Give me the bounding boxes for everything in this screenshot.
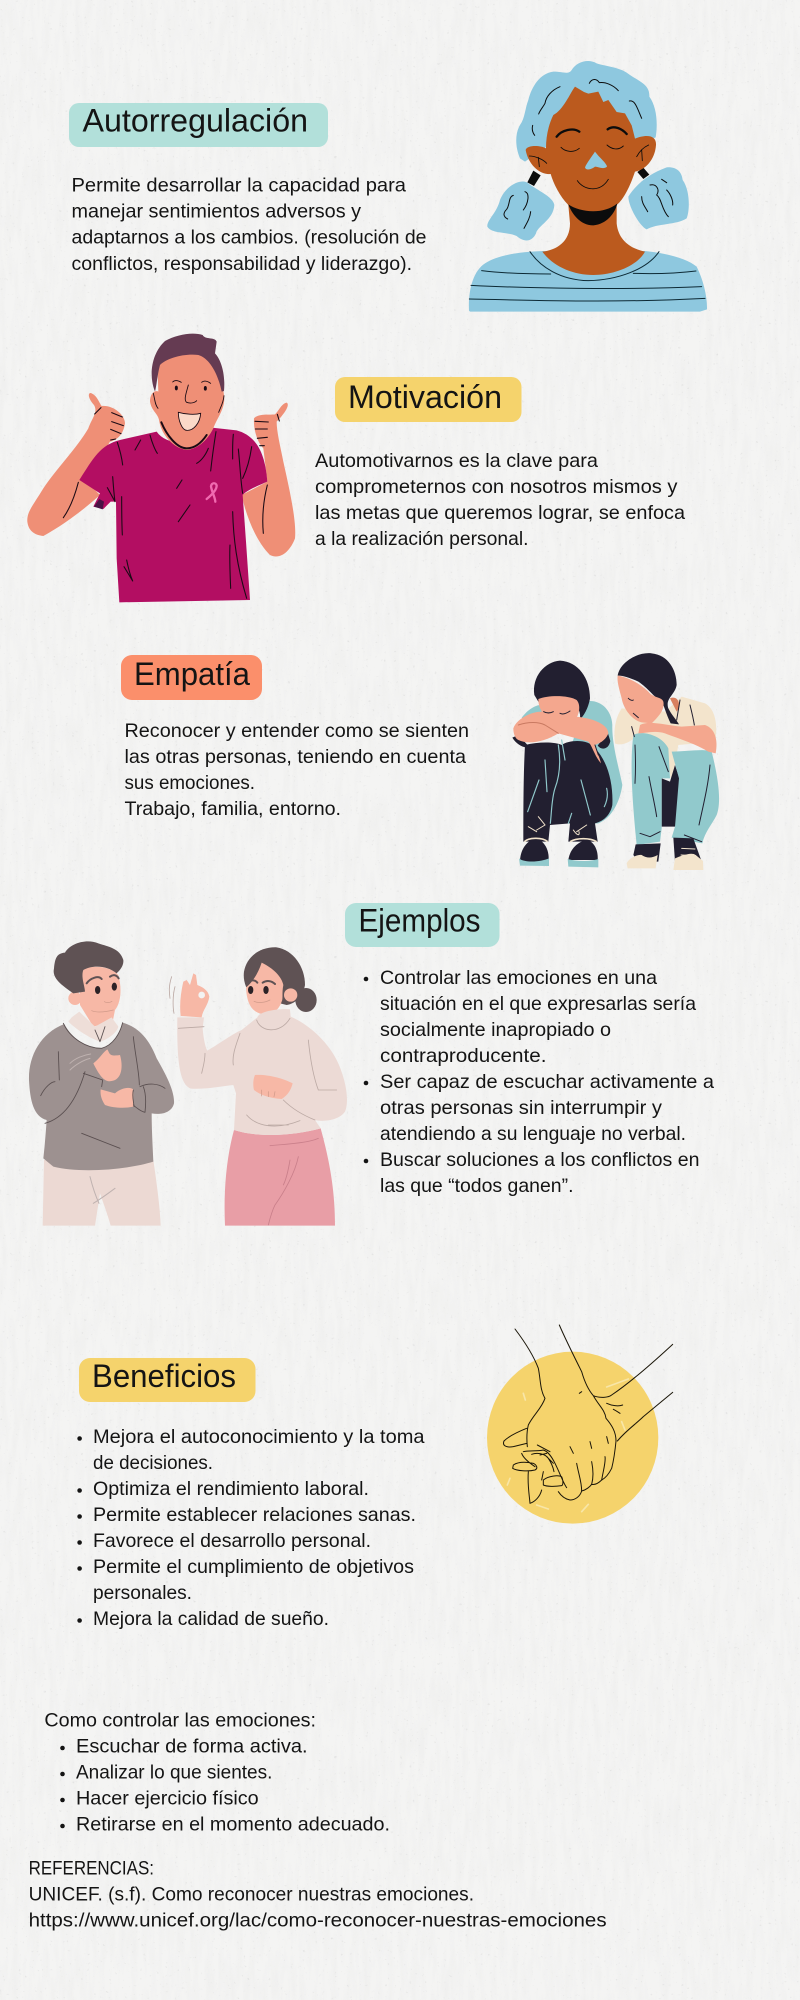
arms [27, 393, 125, 536]
ribbon [207, 483, 217, 502]
left person: shoes [520, 838, 549, 862]
bulleted list: Beneficios: Permite el cumplimiento de objetivos [93, 1556, 414, 1578]
hair [152, 334, 224, 392]
references: REFERENCIAS: [29, 1858, 154, 1880]
text block: Motivación description: comprometernos con nosotros mismos y [315, 476, 678, 498]
bulleted list: Beneficios: Mejora la calidad de sueño. [93, 1608, 329, 1630]
hand outlines [504, 1325, 673, 1503]
bulleted list: Ejemplos: Controlar las emociones en una [380, 967, 657, 989]
left person: arms [513, 712, 608, 763]
right person: face [617, 676, 664, 723]
heading: Autorregulación: Autorregulación [82, 102, 308, 138]
heading: Ejemplos [345, 902, 500, 947]
bulleted list: Ejemplos: Buscar soluciones a los conflictos en [380, 1149, 700, 1171]
heading: Empatía [121, 655, 262, 700]
illustration: two people sitting hugging their knees [512, 653, 719, 870]
illustration: woman with blue hair and closed eyes [469, 61, 707, 312]
bulleted list: Ejemplos: Ser capaz de escuchar activamente a [380, 1071, 714, 1093]
line work [518, 698, 710, 856]
section: Como controlar las emociones [44, 1710, 390, 1836]
woman: skirt [225, 1128, 335, 1226]
neck shadow [568, 203, 617, 225]
heading: Beneficios [79, 1358, 256, 1402]
text block: Motivación description: Automotivarnos es la clave para [315, 450, 598, 472]
facial lines [469, 79, 705, 301]
heading: Empatía: Empatía [134, 656, 250, 692]
left person: jacket back [572, 701, 622, 825]
references: https://www.unicef.org/lac/como-reconocer-nuestras-emociones [29, 1910, 607, 1932]
man: hair [54, 941, 123, 993]
right person: dark trousers centre [662, 765, 682, 827]
bulleted list: control tips: Retirarse en el momento adecuado. [76, 1814, 390, 1836]
text block: Motivación description: a la realización personal. [315, 528, 528, 550]
woman: sweater [177, 1009, 347, 1135]
text block: Autorregulación description: Permite desarrollar la capacidad para [72, 174, 406, 196]
shirt [79, 428, 267, 602]
bulleted list: Beneficios [77, 1426, 425, 1630]
references: UNICEF. (s.f). Como reconocer nuestras emociones. [29, 1884, 474, 1906]
bulleted list: Ejemplos: contraproducente. [380, 1045, 546, 1067]
man: sweater [29, 1023, 174, 1170]
right person: hair [618, 653, 679, 724]
section: Beneficios [77, 1325, 673, 1630]
hair [516, 61, 657, 162]
man: collar [68, 1012, 118, 1042]
faces [95, 983, 269, 994]
section: Ejemplos [29, 902, 714, 1226]
ponytails [487, 181, 554, 240]
references [29, 1858, 607, 1932]
yellow circle [487, 1352, 658, 1524]
face and neck [526, 87, 656, 275]
bulleted list: Ejemplos: atendiendo a su lenguaje no verbal. [380, 1123, 686, 1145]
man: hands [93, 1049, 122, 1081]
bulleted list: Beneficios: Favorece el desarrollo personal. [93, 1530, 371, 1552]
text block: Autorregulación description: conflictos, responsabilidad y liderazgo). [72, 253, 412, 275]
bulleted list: control tips: Escuchar de forma activa. [76, 1736, 308, 1758]
heading: Motivación [335, 377, 522, 422]
bulleted list: Ejemplos: otras personas sin interrumpir y [380, 1097, 662, 1119]
bulleted list: control tips [60, 1736, 390, 1836]
bulleted list: Ejemplos [364, 967, 714, 1197]
woman: bun [295, 988, 317, 1012]
woman: hair [244, 947, 305, 1005]
left person: hair [534, 661, 590, 719]
shirt [469, 251, 707, 312]
text block: Empatía description: Trabajo, familia, entorno. [124, 798, 341, 820]
left person: dark sleeves [512, 732, 610, 749]
right person: shirt [614, 697, 716, 783]
text block: Motivación description [315, 450, 685, 550]
mouth [178, 412, 201, 430]
heading: Motivación: Motivación [348, 379, 502, 415]
bulleted list: Beneficios: personales. [93, 1582, 192, 1604]
hair ties [527, 171, 541, 186]
left person: trousers [523, 741, 612, 842]
man: neck and face [80, 967, 121, 1027]
heading: Beneficios: Beneficios [92, 1358, 236, 1394]
section: Empatía [121, 653, 719, 870]
right person: shoes [633, 843, 661, 862]
head [150, 354, 224, 450]
bulleted list: control tips: Analizar lo que sientes. [76, 1762, 272, 1784]
light brush marks [507, 1379, 628, 1512]
text block: Empatía description: las otras personas, teniendo en cuenta [124, 746, 466, 768]
section: Motivación [27, 334, 685, 602]
text block: Empatía description: Reconocer y entender como se sienten [124, 720, 469, 742]
woman: face [246, 963, 283, 1014]
nose [585, 152, 607, 169]
text block: Autorregulación description: manejar sentimientos adversos y [72, 201, 361, 223]
bulleted list: Ejemplos: situación en el que expresarlas sería [380, 993, 696, 1015]
right person: teal trousers [632, 733, 670, 845]
bulleted list: Ejemplos: las que “todos ganen”. [380, 1175, 574, 1197]
illustration: holding hands on yellow circle [487, 1325, 673, 1524]
line work [63, 381, 279, 598]
heading: Ejemplos: Ejemplos [358, 902, 480, 938]
bulleted list: Beneficios: Mejora el autoconocimiento y la toma [93, 1426, 425, 1448]
bulleted list: Beneficios: Optimiza el rendimiento laboral. [93, 1478, 369, 1500]
bulleted list: Beneficios: Permite establecer relaciones sanas. [93, 1504, 416, 1526]
text heading: Como controlar las emociones: Como controlar las emociones: [44, 1710, 316, 1732]
section: Autorregulación [69, 61, 707, 312]
text block: Empatía description: sus emociones. [124, 772, 255, 794]
text block: Motivación description: las metas que queremos lograr, se enfoca [315, 502, 685, 524]
text block: Autorregulación description [72, 174, 426, 275]
illustration: man and woman talking [29, 941, 347, 1226]
woman: fist [253, 1075, 293, 1099]
left person: face [538, 696, 579, 718]
text block: Empatía description [124, 720, 469, 820]
bulleted list: Beneficios: de decisiones. [93, 1452, 213, 1474]
bulleted list: control tips: Hacer ejercicio físico [76, 1788, 259, 1810]
text block: Autorregulación description: adaptarnos a los cambios. (resolución de [72, 227, 426, 249]
illustration: man giving two thumbs up [27, 334, 295, 602]
bulleted list: Ejemplos: socialmente inapropiado o [380, 1019, 611, 1041]
right person: arm [638, 723, 717, 753]
man: trousers [43, 1160, 161, 1226]
woman: OK hand [180, 973, 209, 1017]
eyes [175, 386, 178, 390]
